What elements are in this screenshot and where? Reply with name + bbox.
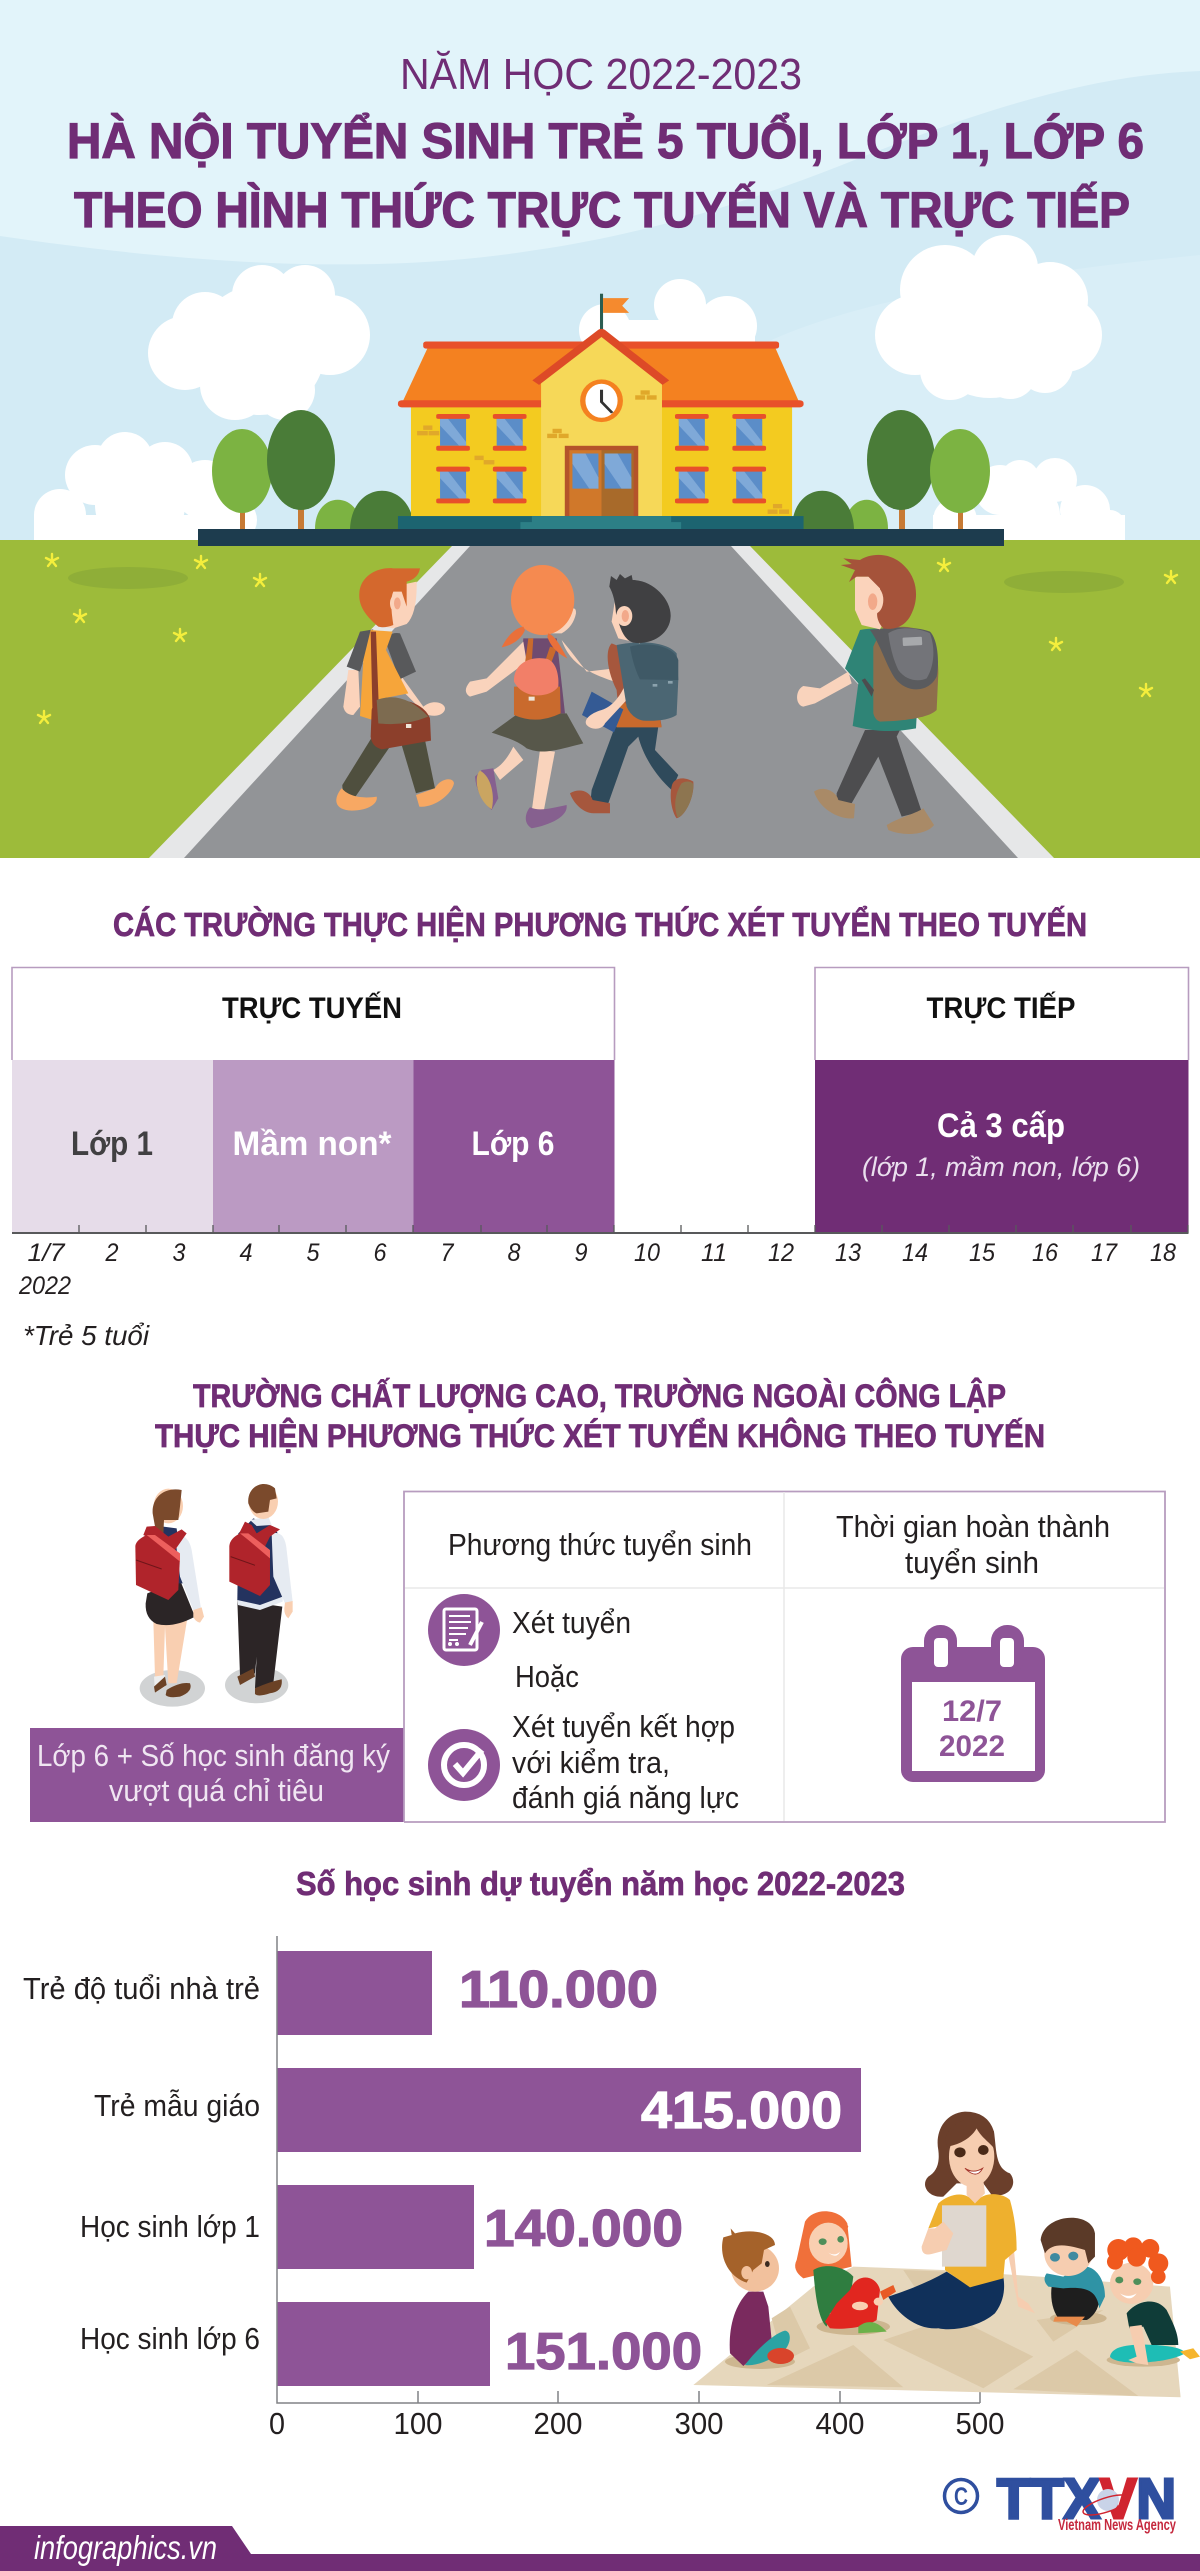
block: lớp 1 — [12, 1060, 213, 1233]
month/day labels: 18 — [1150, 1239, 1176, 1267]
icon: calendar 12/7/2022: 2022 — [939, 1730, 1005, 1763]
icon: calendar 12/7/2022 — [901, 1625, 1045, 1782]
month/day labels: 16 — [1032, 1239, 1058, 1267]
axis — [277, 1936, 980, 2403]
girl with pigtails — [466, 565, 626, 828]
month/day labels: 9 — [574, 1239, 588, 1267]
title — [67, 50, 1144, 238]
month/day labels: 14 — [902, 1239, 928, 1267]
title: NĂM HỌC 2022-2023 — [400, 50, 802, 99]
category labels: Học sinh lớp 1 — [80, 2209, 260, 2244]
clouds — [34, 235, 1125, 550]
category labels — [23, 1971, 260, 2356]
logo: TTXVN: TTXVN — [997, 2467, 1176, 2531]
callout: lớp 6 condition: Lớp 6 + Số học sinh đăng ký — [37, 1738, 390, 1773]
month/day labels: 6 — [374, 1239, 387, 1267]
section heading: high quality and private schools — [155, 1378, 1045, 1454]
section heading: high quality and private schools: TRƯỜNG CHẤT LƯỢNG CAO, TRƯỜNG NGOÀI CÔNG LẬP — [193, 1378, 1006, 1414]
text: xét tuyển: Xét tuyển — [512, 1605, 631, 1640]
month/day labels: 11 — [701, 1239, 727, 1267]
footer bar — [0, 2526, 1200, 2571]
direct header — [815, 968, 1188, 1060]
child 3 — [1041, 2218, 1107, 2327]
panel: admission table — [404, 1492, 1165, 1822]
logo: TTXVN: C — [954, 2483, 968, 2511]
child 4 — [1107, 2237, 1200, 2367]
icon: calendar 12/7/2022: 12/7 — [942, 1695, 1002, 1728]
block: cả 3 cấp: (lớp 1, mầm non, lớp 6) — [862, 1152, 1140, 1182]
month/day labels: 4 — [240, 1239, 252, 1267]
column header: completion time — [836, 1509, 1110, 1580]
month/day labels: 15 — [969, 1239, 995, 1267]
values: 140.000 — [484, 2200, 683, 2258]
block: cả 3 cấp: Cả 3 cấp — [937, 1107, 1065, 1145]
section heading: schools admitting by zone: CÁC TRƯỜNG THỰC HIỆN PHƯƠNG THỨC XÉT TUYỂN THEO TUYẾN — [113, 906, 1087, 943]
child 2 — [795, 2211, 896, 2335]
footer bar: infographics.vn — [34, 2529, 217, 2566]
block: cả 3 cấp — [815, 1060, 1188, 1233]
teacher — [888, 2112, 1035, 2329]
footnote: *Trẻ 5 tuổi — [23, 1320, 150, 1351]
illustration: two students with backpacks — [135, 1484, 293, 1707]
month/day labels: 7 — [440, 1239, 455, 1267]
online header: TRỰC TUYẾN — [222, 991, 402, 1025]
axis labels: 300 — [674, 2406, 724, 2441]
text: hoặc: Hoặc — [515, 1659, 579, 1694]
axis labels: 400 — [816, 2406, 864, 2441]
values: 151.000 — [505, 2323, 702, 2381]
icon: document — [428, 1594, 500, 1666]
axis with tick marks — [12, 1225, 1188, 1233]
panel: hero illustration — [0, 0, 1200, 858]
axis labels: 500 — [956, 2406, 1004, 2441]
axis labels: 100 — [394, 2406, 442, 2441]
bar chart — [23, 1936, 1004, 2441]
category labels: Trẻ độ tuổi nhà trẻ — [23, 1971, 260, 2006]
text: combined admission: với kiểm tra, — [512, 1745, 670, 1780]
values: 110.000 — [459, 1961, 658, 2019]
section heading: high quality and private schools: THỰC HIỆN PHƯƠNG THỨC XÉT TUYỂN KHÔNG THEO TUYẾN — [155, 1418, 1045, 1454]
column header: completion time: tuyển sinh — [905, 1545, 1039, 1580]
kid with messenger bag — [336, 568, 454, 811]
school building — [398, 294, 804, 530]
values — [459, 1961, 842, 2381]
block: lớp 1: Lớp 1 — [71, 1125, 153, 1163]
month/day labels: 2022 — [18, 1272, 71, 1300]
axis labels — [269, 2406, 1004, 2441]
panel: timeline — [12, 968, 1188, 1351]
online header — [12, 968, 614, 1060]
child 1 — [722, 2228, 795, 2369]
girl — [153, 1618, 187, 1683]
month/day labels: 8 — [508, 1239, 521, 1267]
title: THEO HÌNH THỨC TRỰC TUYẾN VÀ TRỰC TIẾP — [74, 182, 1130, 238]
category labels: Trẻ mẫu giáo — [94, 2088, 260, 2123]
block: lớp 6 — [414, 1060, 614, 1233]
month/day labels: 5 — [306, 1239, 320, 1267]
grass and road — [0, 540, 1200, 858]
column header: completion time: Thời gian hoàn thành — [836, 1509, 1110, 1544]
text: combined admission: đánh giá năng lực — [512, 1780, 739, 1815]
callout: lớp 6 condition — [30, 1728, 404, 1822]
bars — [277, 1951, 861, 2386]
column header: method: Phương thức tuyển sinh — [448, 1527, 752, 1562]
illustration: teacher and children on rug — [693, 2112, 1200, 2397]
boy — [237, 1600, 282, 1688]
category labels: Học sinh lớp 6 — [80, 2321, 260, 2356]
block: mầm non — [213, 1060, 414, 1233]
axis labels: 200 — [534, 2406, 582, 2441]
trees — [212, 410, 990, 530]
values: 415.000 — [641, 2082, 842, 2140]
block: mầm non: Mầm non* — [232, 1125, 392, 1163]
month/day labels: 10 — [634, 1239, 660, 1267]
illustration: students walking to school — [336, 555, 938, 834]
icon: checkmark — [428, 1729, 500, 1801]
month/day labels — [18, 1239, 1176, 1300]
month/day labels: 2 — [105, 1239, 119, 1267]
boy with backpack — [570, 574, 693, 818]
section heading: number of students: Số học sinh dự tuyển năm học 2022-2023 — [296, 1865, 905, 1902]
month/day labels: 1/7 — [28, 1239, 66, 1267]
boy on the right — [797, 555, 938, 834]
rug — [693, 2267, 1181, 2397]
month/day labels: 13 — [835, 1239, 861, 1267]
block: lớp 6: Lớp 6 — [472, 1125, 554, 1163]
text: combined admission: Xét tuyển kết hợp — [512, 1709, 735, 1744]
month/day labels: 3 — [172, 1239, 186, 1267]
direct header: TRỰC TIẾP — [926, 991, 1076, 1025]
school base slab — [198, 529, 1004, 546]
callout: lớp 6 condition: vượt quá chỉ tiêu — [109, 1773, 324, 1808]
month/day labels: 17 — [1091, 1239, 1118, 1267]
title: HÀ NỘI TUYỂN SINH TRẺ 5 TUỔI, LỚP 1, LỚP 6 — [67, 112, 1144, 169]
text: combined admission — [512, 1709, 739, 1815]
month/day labels: 12 — [768, 1239, 794, 1267]
axis labels: 0 — [269, 2406, 285, 2441]
